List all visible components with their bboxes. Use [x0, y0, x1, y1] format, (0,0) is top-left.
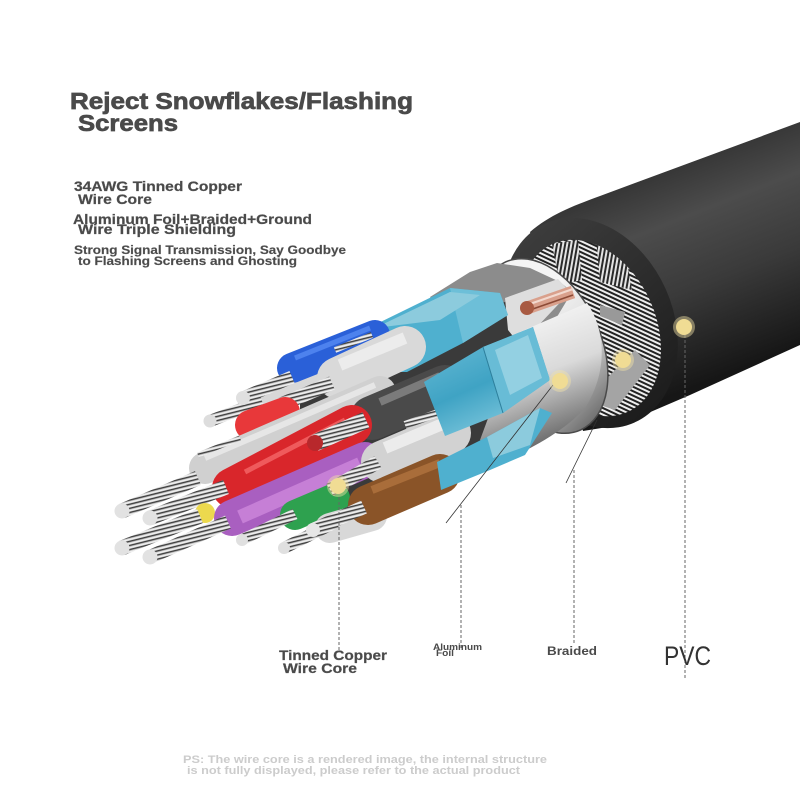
braided shield — [533, 240, 661, 416]
feature text: triple shielding — [73, 211, 312, 237]
wire: red back — [250, 412, 285, 425]
label: aluminum foil: Foil — [436, 648, 454, 658]
leader: braided — [566, 349, 634, 645]
leader: aluminum foil — [446, 370, 571, 650]
disclaimer note — [183, 754, 547, 777]
feature text: triple shielding: Wire Triple Shielding — [78, 221, 236, 237]
feature text: wire core: 34AWG Tinned Copper — [74, 178, 243, 194]
lower aluminum foil — [437, 408, 552, 490]
dark shadow behind wires — [300, 300, 530, 510]
leader: PVC — [673, 316, 695, 678]
disclaimer note: is not fully displayed, please refer to the actual product — [187, 765, 520, 777]
title — [70, 88, 413, 136]
wire: brown — [306, 463, 440, 537]
wire: white lower back — [278, 516, 372, 554]
wire: dark grey — [372, 376, 445, 418]
label: braided: Braided — [547, 644, 597, 658]
sheath front ring — [470, 190, 710, 456]
label: PVC: PVC — [664, 641, 711, 671]
wire: white middle — [330, 410, 450, 490]
feature text: wire core: Wire Core — [78, 191, 152, 207]
wire: purple — [142, 460, 365, 564]
wire: white upper — [273, 335, 405, 412]
feature text: triple shielding: Aluminum Foil+Braided+Ground — [73, 211, 312, 227]
wire: grey back — [204, 380, 320, 428]
feature text: signal transmission: to Flashing Screens and Ghosting — [78, 254, 297, 268]
wire: red — [142, 420, 366, 526]
feature text: signal transmission: Strong Signal Transmission, Say Goodbye — [74, 243, 346, 257]
leader: wire core — [327, 475, 349, 650]
front silver foil tube — [480, 303, 602, 460]
label: tinned copper wire core: Wire Core — [283, 661, 358, 676]
ground wire: copper — [520, 289, 573, 315]
back silver foil tube — [430, 263, 572, 350]
label: tinned copper wire core: Tinned Copper — [279, 648, 388, 663]
title: Reject Snowflakes/Flashing — [70, 88, 413, 114]
wire: grey long — [114, 385, 380, 518]
feature text: wire core — [74, 178, 243, 207]
wire: green — [236, 498, 335, 546]
wire: blue — [236, 328, 375, 405]
label: aluminum foil — [433, 642, 482, 658]
feature text: signal transmission — [74, 243, 346, 268]
front aluminum foil — [424, 327, 550, 436]
title: Screens — [78, 110, 178, 136]
disclaimer note: PS: The wire core is a rendered image, the internal structure — [183, 754, 547, 766]
silver foil tube base — [453, 238, 633, 454]
wire: yellow back — [114, 503, 215, 556]
upper aluminum foil — [360, 288, 508, 372]
label: tinned copper wire core — [279, 648, 388, 676]
inner gap highlights — [505, 279, 570, 345]
cable illustration — [114, 122, 800, 564]
PVC outer sheath — [530, 122, 800, 431]
label: aluminum foil: Aluminum — [433, 642, 482, 652]
